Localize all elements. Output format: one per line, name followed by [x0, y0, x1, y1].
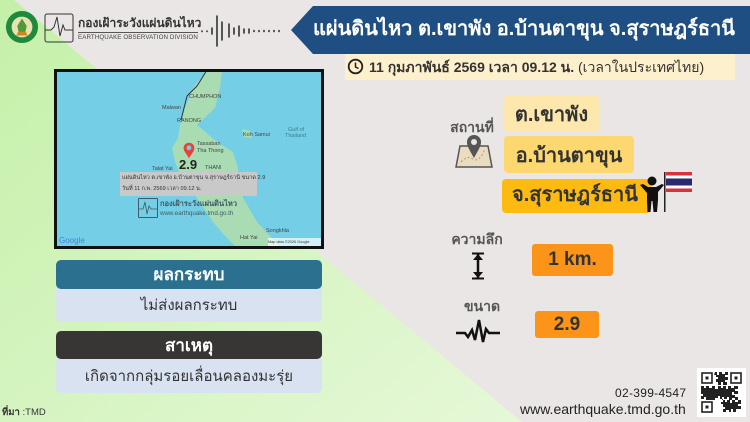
map panel: Koh Samui: [243, 132, 270, 138]
google logo: Google: [59, 236, 85, 245]
date and time line: [345, 54, 735, 80]
subdistrict tag: [504, 96, 599, 132]
map panel: Thailand: [285, 133, 306, 139]
logo: department emblem: [6, 11, 38, 43]
qr code: [697, 368, 746, 417]
map panel: Hat Yai: [240, 235, 258, 241]
website: www.earthquake.tmd.go.th: [520, 401, 686, 417]
logo: earthquake division wordmark: EARTHQUAKE OBSERVATION DIVISION: [78, 34, 198, 41]
panel: impact: [56, 260, 322, 322]
icon: person with thai flag: [640, 172, 692, 212]
map watermark: กองเฝ้าระวังแผ่นดินไหว: [160, 199, 237, 208]
map watermark: www.earthquake.tmd.go.th: [160, 210, 233, 217]
district tag: อ.บ้านตาขุน: [516, 144, 622, 166]
map panel: CHUMPHON: [189, 94, 221, 100]
icon: map pin on folded map: [455, 135, 493, 168]
cause heading: สาเหตุ: [165, 336, 213, 354]
map panel: THANI: [205, 165, 222, 171]
map panel: Songkhla: [266, 228, 290, 234]
phone number: 02-399-4547: [615, 386, 686, 400]
map caption box: วันที่ 11 ก.พ. 2569 เวลา 09.12 น.: [122, 186, 201, 192]
logo: earthquake division wordmark: กองเฝ้าระวังแผ่นดินไหว: [78, 16, 201, 30]
land mass: [172, 70, 281, 248]
cause body: เกิดจากกลุ่มรอยเลื่อนคลองมะรุ่ย: [85, 368, 293, 384]
title banner: [291, 6, 750, 54]
map panel: RANONG: [177, 118, 201, 124]
marker: epicentre pin: [184, 142, 194, 158]
impact heading: ผลกระทบ: [154, 265, 224, 284]
map watermark: [138, 198, 237, 218]
depth value: 1 km.: [548, 249, 597, 270]
icon: seismic wave: [456, 320, 500, 342]
map caption box: แผ่นดินไหว ต.เขาพัง อ.บ้านตาขุน จ.สุราษฎร์ธานี ขนาด 2.9: [122, 175, 265, 181]
map panel: Talat Yai: [152, 166, 173, 172]
magnitude value: [535, 311, 599, 338]
logo: earthquake division wordmark: [44, 14, 201, 42]
cause body: [56, 356, 322, 393]
title banner: แผ่นดินไหว ต.เขาพัง อ.บ้านตาขุน จ.สุราษฎร์ธานี: [313, 18, 735, 40]
impact heading: [56, 260, 322, 289]
icon: clock: [348, 58, 364, 74]
province tag: จ.สุราษฎร์ธานี: [512, 184, 638, 206]
map panel: Malwan: [162, 105, 181, 111]
panel: cause: [56, 331, 322, 393]
map attribution: Map data ©2026 Google: [268, 240, 309, 244]
province tag: [502, 179, 651, 213]
cause heading: [56, 331, 322, 359]
impact body: [56, 285, 322, 322]
icon: seismic sound wave: [201, 15, 280, 47]
magnitude value: 2.9: [554, 314, 580, 334]
date and time line: 11 กุมภาพันธ์ 2569 เวลา 09.12 น. (เวลาในประเทศไทย): [369, 59, 704, 75]
map attribution: [268, 238, 321, 246]
impact body: ไม่ส่งผลกระทบ: [141, 296, 237, 314]
subdistrict tag: ต.เขาพัง: [515, 104, 588, 126]
map panel: Gulf of: [288, 127, 305, 133]
map panel: Tassaban: [197, 141, 221, 147]
icon: depth arrow: [472, 252, 484, 280]
map caption box: [120, 172, 257, 196]
magnitude label: ขนาด: [464, 298, 500, 314]
map panel: Tha Thong: [197, 148, 224, 154]
source note: ที่มา :TMD: [2, 407, 46, 418]
depth value: [532, 244, 613, 276]
map panel: [54, 69, 324, 249]
depth label: ความลึก: [451, 231, 503, 247]
location label: สถานที่: [450, 119, 494, 135]
magnitude label on map: 2.9: [179, 157, 197, 172]
district tag: [504, 136, 634, 173]
